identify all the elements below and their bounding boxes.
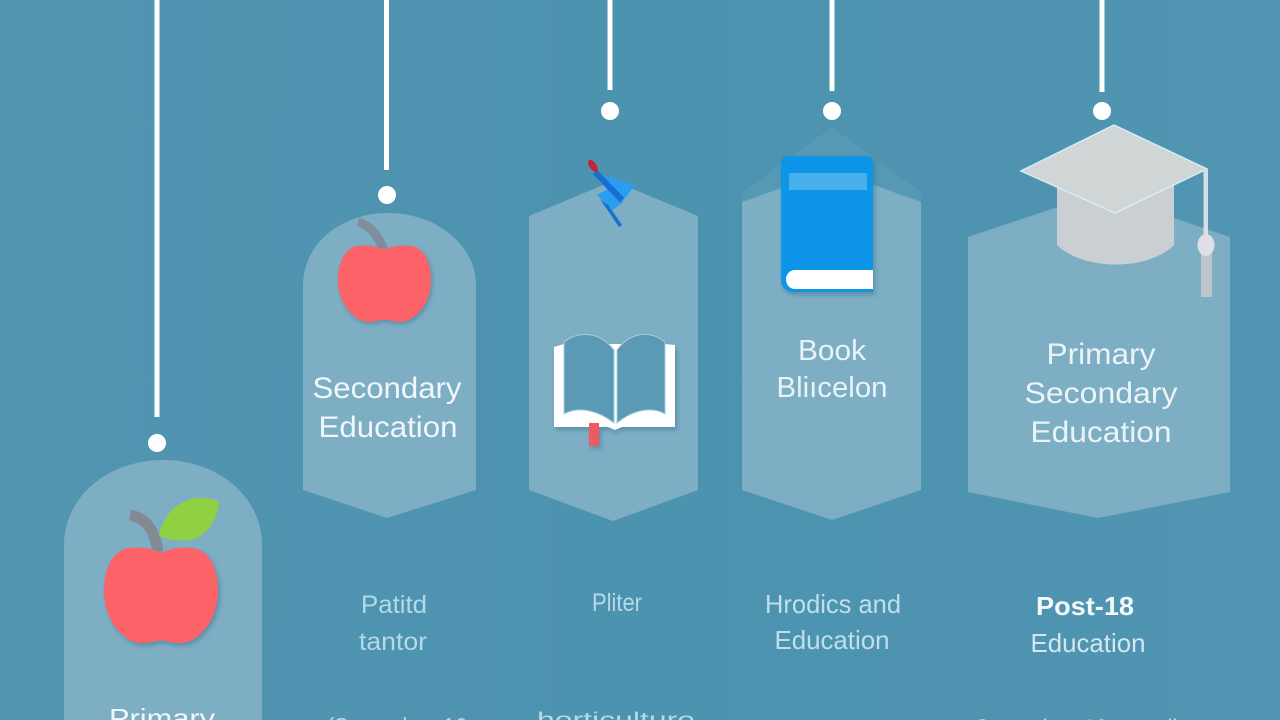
icon: blue book (781, 156, 873, 292)
heading: secondary education: Education (318, 411, 458, 444)
caption: post-18 education (975, 591, 1201, 720)
icon: book label (789, 173, 867, 190)
panel: book stage (529, 0, 698, 521)
heading: book education: Bliıcelon (776, 372, 888, 404)
icon: red apple (338, 222, 431, 322)
panel: secondary education (303, 0, 476, 518)
icon: tassel (1198, 234, 1214, 297)
caption: post-18 education: Education (1030, 628, 1146, 658)
heading: book education (776, 335, 888, 404)
heading: primary secondary education (1024, 338, 1178, 449)
hanging line: primary (148, 0, 166, 452)
icon: bookmark (589, 423, 599, 446)
heading: book education: Book (798, 335, 867, 367)
icon: small pen (586, 158, 635, 227)
hanging line: fifth stage (1093, 0, 1111, 120)
icon: graduation cap (1021, 125, 1214, 297)
caption: column two (327, 591, 467, 720)
icon: open book (554, 334, 675, 446)
heading: primary secondary education: Secondary (1024, 377, 1178, 410)
hanging line: secondary (378, 0, 396, 204)
heading: primary secondary education: Primary (1046, 338, 1156, 371)
caption: post-18 education: Post-18 (1036, 591, 1134, 621)
hanging line: third stage (601, 0, 619, 120)
caption: column four (765, 589, 901, 655)
panel: post-secondary (968, 0, 1230, 518)
panel: primary (64, 0, 262, 720)
caption: column four: Education (774, 625, 890, 655)
caption: column four: Hrodics and (765, 589, 901, 619)
heading: secondary education: Secondary (312, 372, 462, 405)
caption: column three: Pliter (592, 589, 642, 617)
caption: column three (537, 589, 695, 720)
heading: primary secondary education: Education (1030, 416, 1172, 449)
panel: book education (742, 0, 921, 520)
hanging line: fourth stage (823, 0, 841, 120)
icon: red apple with leaf (104, 498, 219, 643)
caption: column two: Patitd (361, 591, 427, 619)
caption: column two: tantor (359, 628, 427, 656)
heading: secondary education (312, 372, 462, 444)
